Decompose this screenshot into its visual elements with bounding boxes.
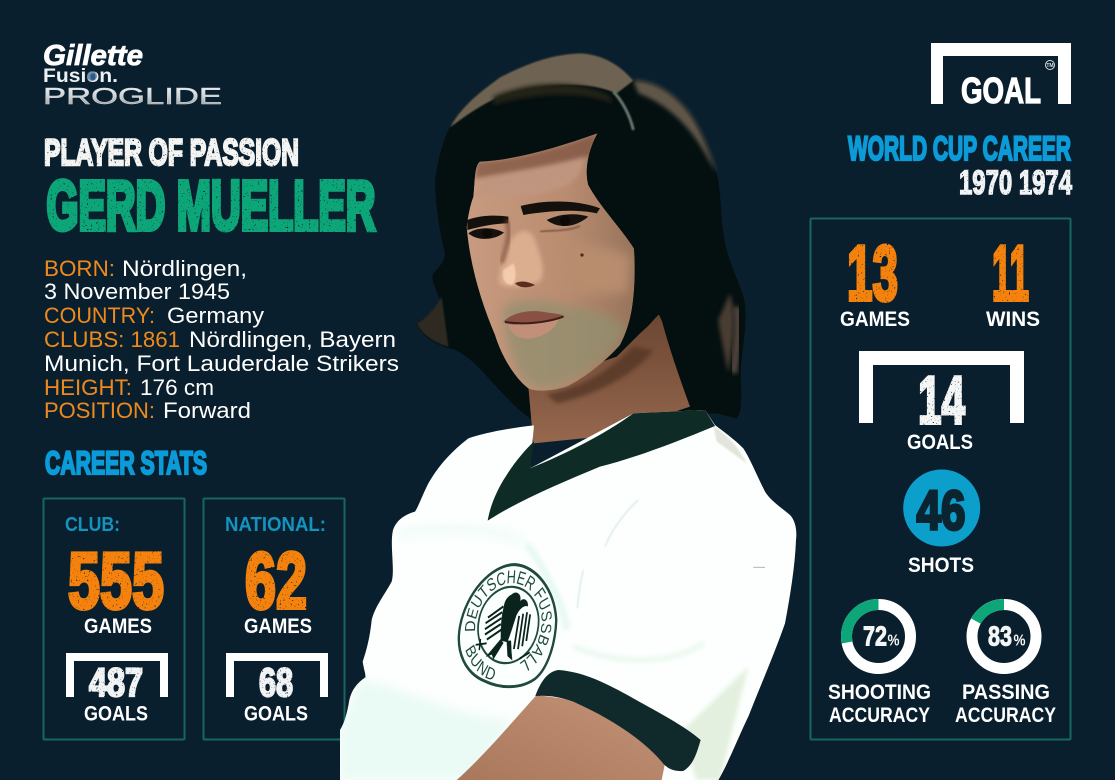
player biography: HEIGHT: [44, 375, 132, 400]
collar [488, 410, 715, 521]
player biography: Nördlingen, Bayern [189, 327, 396, 352]
club label: CLUB: [65, 514, 120, 536]
donut: shooting accuracy 72% [846, 604, 910, 668]
panel: national stats [204, 498, 344, 740]
skin of the arm [457, 695, 665, 780]
goals number: 14 [918, 362, 965, 438]
club games label: GAMES [84, 615, 152, 638]
brand logo: Gillette Fusion ProGlide [43, 40, 222, 109]
brand logo: Goal [931, 43, 1071, 111]
player biography: COUNTRY: [44, 303, 155, 328]
national goals number: 68 [259, 661, 293, 705]
player biography: Germany [167, 303, 265, 328]
badge: Deutscher Fussball Bund: BUND [466, 644, 495, 680]
panel: World Cup stats: 11 [992, 229, 1029, 317]
national goals label: GOALS [244, 702, 308, 726]
player biography: 3 November 1945 [44, 279, 230, 304]
brand logo: Gillette Fusion ProGlide: PROGLIDE [43, 83, 222, 109]
shirt [340, 410, 796, 780]
player portrait [340, 52, 796, 780]
donut: passing accuracy 83%: 83 [988, 620, 1012, 652]
shots circle: 46 [916, 478, 966, 542]
eyebrows [467, 216, 508, 230]
panel: club stats [44, 498, 184, 740]
mole [580, 253, 584, 257]
national label: NATIONAL: [225, 514, 326, 536]
panel: World Cup stats: ACCURACY [829, 704, 930, 727]
face [440, 53, 738, 403]
mouth [503, 311, 565, 325]
heading: Gerd Mueller: GERD MUELLER [46, 166, 376, 244]
player biography: 176 cm [140, 375, 214, 400]
donut: passing accuracy 83% [972, 604, 1036, 668]
brand logo: Gillette Fusion ProGlide: Fusion. [43, 66, 118, 87]
brand logo: Goal: TM [1046, 63, 1054, 69]
club goals icon [66, 653, 168, 697]
eyes [468, 228, 504, 239]
national games label: GAMES [244, 615, 312, 638]
shirt shading [340, 426, 765, 780]
national games number: 62 [245, 536, 307, 625]
nostril [515, 282, 535, 287]
jaw neck shadow [547, 347, 653, 403]
heading: Career Stats: CAREER STATS [45, 445, 207, 481]
title: Player of Passion: PLAYER OF PASSION [44, 132, 299, 173]
badge: Deutscher Fussball Bund: DEUTSCHER FUSSBALL [464, 570, 552, 671]
hair highlights [450, 53, 633, 127]
player biography [44, 256, 399, 423]
badge eagle [473, 587, 541, 666]
panel: World Cup stats [810, 218, 1070, 740]
games number: 13 [847, 229, 898, 317]
shooting accuracy label: SHOOTING [828, 681, 931, 704]
player biography: Munich, Fort Lauderdale Strikers [44, 351, 399, 376]
donut: shooting accuracy 72%: 72 [863, 620, 887, 652]
donut: passing accuracy 83%: % [1014, 632, 1026, 650]
national goals icon [226, 653, 328, 697]
brand logo: Gillette Fusion ProGlide: Gillette [43, 40, 143, 72]
goals icon [859, 351, 1024, 423]
player biography: Nördlingen, [122, 256, 247, 281]
brand logo: Goal: GOAL [961, 70, 1041, 111]
club goals label: GOALS [84, 702, 148, 726]
player biography: CLUBS: 1861 [44, 327, 180, 352]
player biography: BORN: [44, 256, 115, 281]
donut: shooting accuracy 72%: % [888, 632, 900, 650]
player biography: POSITION: [44, 398, 155, 423]
panel: World Cup stats: ACCURACY [955, 704, 1056, 727]
World Cup years: 1970 1974 [959, 164, 1072, 202]
neck [528, 313, 690, 443]
games label: GAMES [840, 308, 910, 331]
club games number: 555 [68, 536, 164, 625]
club goals number: 487 [89, 661, 143, 705]
shots circle [903, 470, 980, 546]
player biography: Forward [163, 398, 251, 423]
shots label: SHOTS [908, 554, 974, 577]
passing accuracy label: PASSING [962, 681, 1050, 704]
front hair [440, 97, 720, 373]
wins label: WINS [986, 308, 1040, 331]
hair back [416, 53, 746, 427]
goals label: GOALS [907, 431, 973, 454]
sleeve cuff [535, 670, 701, 771]
